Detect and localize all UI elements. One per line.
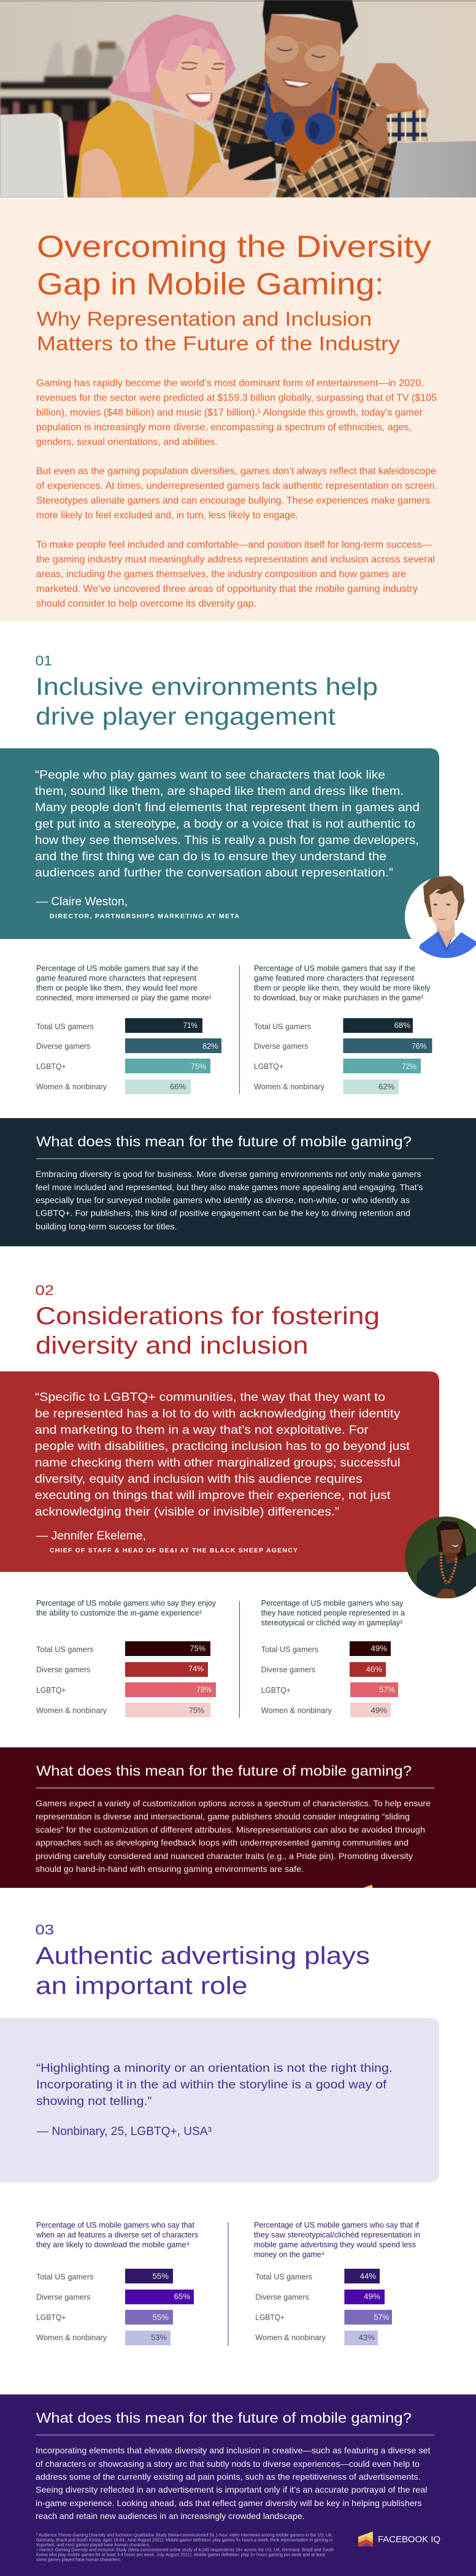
panel: quote from Jennifer Ekeleme: executing on things that will improve their experience, not just xyxy=(35,1489,391,1502)
chart: spend less when ad is stereotypical: money on the game⁴ xyxy=(254,2250,324,2259)
chart: more likely to download or buy: 62% xyxy=(378,1082,394,1091)
person: man with glasses and headphones xyxy=(213,0,429,197)
footnotes: important, and most games played have human characters. xyxy=(36,2542,150,2548)
chart: enjoy customizing the in-game experience: 75% xyxy=(189,1706,204,1715)
heading: section 02 xyxy=(36,1282,380,1359)
photo: two friends laughing at a phone xyxy=(0,0,476,197)
chart: spend less when ad is stereotypical: they saw stereotypical/clichéd representation in xyxy=(254,2231,420,2239)
icon: phone in hand xyxy=(185,141,279,197)
panel: what does this mean, section 03: Incorporating elements that elevate diversity and inclusion in creative—such as featuring a diverse set xyxy=(36,2445,431,2455)
panel: what does this mean, section 01: What does this mean for the future of mobile gaming? xyxy=(36,1133,412,1149)
intro text block: areas, including the games themselves, the industry composition and how games are xyxy=(36,569,406,580)
chart: enjoy customizing the in-game experience: the ability to customize the in-game experience² xyxy=(36,1609,202,1617)
chart: feel more connected: Diverse gamers xyxy=(36,1042,91,1051)
chart: likely to download when ad is diverse: 55% xyxy=(152,2272,169,2281)
footnotes: some games played have human characters. xyxy=(36,2557,121,2563)
panel: what does this mean, section 03: reach and retain new audiences in an increasingly crowded landscape. xyxy=(36,2511,304,2521)
chart: spend less when ad is stereotypical: 44% xyxy=(360,2272,377,2281)
chart: feel more connected: connected, more immersed or play the game more¹ xyxy=(36,994,212,1002)
chart: feel more connected: 82% xyxy=(202,1041,218,1051)
chart: feel more connected: them or people like them, they would feel more xyxy=(36,984,198,992)
intro text block xyxy=(36,378,437,609)
chart: noticed stereotypical representation: they have noticed people represented in a xyxy=(261,1609,405,1617)
panel: quote from Claire Weston: get put into a stereotype, a body or a voice that is not authentic to xyxy=(35,817,415,830)
chart: feel more connected: Total US gamers xyxy=(36,1022,93,1031)
panel: what does this mean, section 02: What does this mean for the future of mobile gaming? xyxy=(36,1763,412,1779)
intro text block: Gaming has rapidly become the world’s most dominant form of entertainment—in 2020, xyxy=(36,378,424,389)
panel: what does this mean, section 03: in-game experience. Looking ahead, ads that reflect gamer diversity will be key in helping publishers xyxy=(36,2498,422,2508)
chart: spend less when ad is stereotypical xyxy=(254,2221,420,2345)
panel: quote from Jennifer Ekeleme xyxy=(0,1371,439,1572)
panel: what does this mean, section 02: representation is diverse and intersectional, game publishers should consider integrating “sliding xyxy=(36,1812,410,1822)
chart: more likely to download or buy: Women & nonbinary xyxy=(254,1083,325,1091)
panel: quote from Jennifer Ekeleme: diversity, equity and inclusion with this audience requires xyxy=(35,1472,363,1485)
panel: what does this mean, section 02: Gamers expect a variety of customization options across a spectrum of characteristics. To help ensure xyxy=(36,1798,431,1808)
heading: section 01 xyxy=(36,653,378,730)
intro text block: of experiences. At times, underrepresented gamers lack authentic representation on screen. xyxy=(36,481,437,491)
chart: likely to download when ad is diverse: when an ad features a diverse set of characters xyxy=(36,2231,198,2239)
panel: quote from Jennifer Ekeleme: be represented has a lot to do with acknowledging their identity xyxy=(35,1407,401,1420)
chart: likely to download when ad is diverse: Diverse gamers xyxy=(36,2293,91,2302)
panel: quote from Claire Weston: and the first thing we can do is to ensure they understand the xyxy=(35,850,386,864)
intro text block: the gaming industry must meaningfully address representation and inclusion across several xyxy=(36,554,435,565)
panel: quote from Jennifer Ekeleme: acknowledging their (visible or invisible) differences.” xyxy=(35,1505,339,1519)
panel: quote from Jennifer Ekeleme: — Jennifer Ekeleme, xyxy=(36,1529,146,1543)
chart: more likely to download or buy: game featured more characters that represent xyxy=(254,974,415,983)
heading: section 03 xyxy=(36,1922,370,1999)
intro text block: more likely to feel excluded and, in turn, less likely to engage. xyxy=(36,510,298,521)
intro text block: Stereotypes alienate gamers and can encourage bullying. These experiences make gamers xyxy=(36,496,430,506)
heading: section 03: an important role xyxy=(36,1972,248,1999)
chart: noticed stereotypical representation: Diverse gamers xyxy=(261,1666,315,1674)
chart: enjoy customizing the in-game experience: LGBTQ+ xyxy=(36,1686,66,1695)
chart: spend less when ad is stereotypical: Percentage of US mobile gamers who say that if xyxy=(254,2221,420,2229)
chart: feel more connected: 66% xyxy=(170,1082,186,1091)
heading: section 03: Authentic advertising plays xyxy=(36,1942,370,1969)
panel: quote from Claire Weston: Many people don’t find elements that represent them in games and xyxy=(35,801,420,815)
panel: quote from Claire Weston: audiences and further the conversation about representation.” xyxy=(35,866,393,880)
heading: section 01: 01 xyxy=(36,653,52,669)
footnotes: ³ Audience Theory Gaming Diversity and Inclusion Qualitative Study (Meta-commissioned 59 1-hour video interviews among mobile gamers in the US, UK, xyxy=(36,2532,333,2538)
photo: portrait of Claire Weston xyxy=(405,876,476,958)
panel: what does this mean, section 01: building long-term success for titles. xyxy=(36,1222,177,1232)
chart: enjoy customizing the in-game experience: 75% xyxy=(190,1644,205,1653)
footnotes: Germany, Brazil and South Korea, ages 18-64, June-August 2021). Mobile gamer definition: play games 5+ hours a week, think representation in gaming is xyxy=(36,2537,332,2543)
chart: likely to download when ad is diverse: 55% xyxy=(152,2313,169,2322)
footnotes: ⁴ HarrisX Gaming Diversity and Inclusion Study (Meta-commissioned online study of 6,045 respondents 18+ across the US, UK, Germany, Brazil and South xyxy=(36,2547,334,2553)
title: Overcoming the Diversity xyxy=(37,229,431,264)
chart: likely to download when ad is diverse: Percentage of US mobile gamers who say that xyxy=(36,2221,195,2229)
panel: gamer quote on advertising xyxy=(0,2018,439,2182)
panel: quote from Jennifer Ekeleme: and marketing to them in a way that’s not exploitative. For xyxy=(35,1423,369,1436)
chart: noticed stereotypical representation: Women & nonbinary xyxy=(261,1706,332,1715)
chart: noticed stereotypical representation: stereotypical or clichéd way in gameplay² xyxy=(261,1619,402,1627)
chart: noticed stereotypical representation: 46% xyxy=(366,1665,382,1674)
chart: noticed stereotypical representation: Total US gamers xyxy=(261,1646,318,1654)
chart: more likely to download or buy: Diverse gamers xyxy=(254,1042,308,1051)
intro text block: billion), movies ($48 billion) and music ($17 billion).¹ Alongside this growth, today’s gamer xyxy=(36,407,423,418)
chart: likely to download when ad is diverse: Total US gamers xyxy=(36,2273,93,2282)
panel: quote from Jennifer Ekeleme: name checking them with other marginalized groups; successful xyxy=(35,1456,400,1470)
heading: section 01: drive player engagement xyxy=(36,703,336,730)
panel: quote from Claire Weston: — Claire Weston, xyxy=(36,895,128,908)
chart: enjoy customizing the in-game experience: Percentage of US mobile gamers who say they enjoy xyxy=(36,1599,217,1608)
chart: feel more connected: Percentage of US mobile gamers that say if the xyxy=(36,964,198,973)
heading: section 02: diversity and inclusion xyxy=(36,1332,308,1359)
intro text block: population is increasingly more diverse, encompassing a spectrum of ethnicities, ages, xyxy=(36,422,412,433)
panel: quote from Claire Weston: them, sound like them, are shaped like them and dress like them. xyxy=(35,784,404,798)
panel: quote from Jennifer Ekeleme: CHIEF OF STAFF & HEAD OF DE&I AT THE BLACK SHEEP AGENCY xyxy=(50,1547,298,1554)
chart: feel more connected: 71% xyxy=(183,1021,198,1030)
panel: what does this mean, section 02: should go hand-in-hand with ensuring gaming environments are safe. xyxy=(36,1864,304,1874)
panel: gamer quote on advertising: “Highlighting a minority or an orientation is not the right thing. xyxy=(36,2061,393,2075)
footnotes: Korea who play mobile games for at least 3-4 hours per week, July-August 2021). Mobile gamer definition: play 3+ hours gaming per week and at least xyxy=(36,2552,326,2558)
panel: quote from Claire Weston: how they see themselves. This is really a push for game developers, xyxy=(35,834,419,847)
chart: noticed stereotypical representation: 57% xyxy=(379,1685,395,1694)
chart: feel more connected xyxy=(36,964,221,1094)
heading: section 02: 02 xyxy=(36,1282,54,1298)
chart: spend less when ad is stereotypical: Diverse gamers xyxy=(255,2293,309,2302)
subtitle: Why Representation and Inclusion xyxy=(37,308,372,330)
chart: likely to download when ad is diverse: LGBTQ+ xyxy=(36,2313,66,2322)
panel: what does this mean, section 03: What does this mean for the future of mobile gaming? xyxy=(36,2410,412,2426)
chart: likely to download when ad is diverse: 53% xyxy=(151,2333,167,2342)
intro text block: genders, sexual orientations, and abilities. xyxy=(36,437,217,448)
chart: spend less when ad is stereotypical: 43% xyxy=(359,2333,375,2342)
panel: what does this mean, section 02: scales” for the customization of different attributes. Misrepresentations can also be avoided through xyxy=(36,1825,425,1834)
chart: feel more connected: game featured more characters that represent xyxy=(36,974,197,983)
heading: section 01: Inclusive environments help xyxy=(36,673,378,700)
chart: more likely to download or buy xyxy=(254,964,432,1094)
photo: portrait of Jennifer Ekeleme xyxy=(405,1516,476,1598)
panel: quote from Claire Weston: “People who play games want to see characters that look like xyxy=(35,768,385,781)
panel: what does this mean, section 02: providing carefully considered and nuanced character traits (e.g., a Pride pin). Promoting diversity xyxy=(36,1851,413,1861)
intro text block: To make people feel included and comfortable—and position itself for long-term success— xyxy=(36,540,432,550)
chart: more likely to download or buy: Percentage of US mobile gamers that say if the xyxy=(254,964,415,973)
panel: what does this mean, section 03: address some of the currently existing ad pain points, such as the repetitiveness of advertisements. xyxy=(36,2472,421,2482)
panel: what does this mean, section 01: Embracing diversity is good for business. More diverse gaming environments not only make gamers xyxy=(36,1169,421,1179)
footnotes xyxy=(36,2532,334,2563)
heading: section 02: Considerations for fostering xyxy=(36,1303,380,1330)
chart: noticed stereotypical representation xyxy=(261,1599,405,1717)
chart: enjoy customizing the in-game experience: 74% xyxy=(188,1664,204,1673)
chart: likely to download when ad is diverse: Women & nonbinary xyxy=(36,2334,107,2342)
chart: likely to download when ad is diverse: they are likely to download the mobile game⁴ xyxy=(36,2241,190,2249)
panel: quote from Jennifer Ekeleme: people with disabilities, practicing inclusion has to go beyond just xyxy=(35,1439,410,1453)
panel: what does this mean, section 01: LGBTQ+. For publishers, this kind of positive engagement can be the key to driving retention and xyxy=(36,1208,410,1218)
chart: more likely to download or buy: to download, buy or make purchases in the game¹ xyxy=(254,994,424,1002)
title xyxy=(37,229,431,301)
chart: spend less when ad is stereotypical: 57% xyxy=(374,2313,390,2322)
panel: what does this mean, section 01: especially true for surveyed mobile gamers who identify as diverse, non-white, or who identify as xyxy=(36,1195,410,1205)
chart: noticed stereotypical representation: LGBTQ+ xyxy=(261,1686,291,1695)
chart: noticed stereotypical representation: 49% xyxy=(370,1644,387,1653)
chart: spend less when ad is stereotypical: LGBTQ+ xyxy=(255,2313,285,2322)
chart: feel more connected: 75% xyxy=(191,1062,206,1071)
chart: noticed stereotypical representation: 49% xyxy=(370,1706,387,1715)
chart: more likely to download or buy: LGBTQ+ xyxy=(254,1062,283,1071)
intro text block: marketed. We’ve uncovered three areas of opportunity that the mobile gaming industry xyxy=(36,584,418,594)
chart: likely to download when ad is diverse xyxy=(36,2221,198,2345)
subtitle: Matters to the Future of the Industry xyxy=(37,332,400,355)
chart: more likely to download or buy: 76% xyxy=(412,1041,427,1051)
chart: spend less when ad is stereotypical: 49% xyxy=(364,2292,380,2301)
panel: gamer quote on advertising: Incorporating it in the ad within the storyline is a good way of xyxy=(36,2078,387,2091)
chart: enjoy customizing the in-game experience: Women & nonbinary xyxy=(36,1706,107,1715)
intro text block: should consider to help overcome its diversity gap. xyxy=(36,599,256,609)
chart: noticed stereotypical representation: Percentage of US mobile gamers who say xyxy=(261,1599,404,1608)
subtitle xyxy=(37,308,400,355)
chart: likely to download when ad is diverse: 65% xyxy=(174,2292,191,2301)
heading: section 03: 03 xyxy=(36,1922,54,1938)
chart: more likely to download or buy: 68% xyxy=(394,1021,410,1030)
intro text block: revenues for the sector were predicted at $159.3 billion globally, surpassing that of TV ($105 xyxy=(36,393,437,404)
intro text block: But even as the gaming population diversifies, games don’t always reflect that kaleidoscope xyxy=(36,466,436,477)
title: Gap in Mobile Gaming: xyxy=(37,267,384,301)
chart: spend less when ad is stereotypical: mobile game advertising they would spend less xyxy=(254,2241,416,2249)
panel: what does this mean, section 03: Seeing diversity reflected in an advertisement is important only if it’s an accurate portrayal of the real xyxy=(36,2485,427,2494)
panel: page background intro xyxy=(0,197,476,621)
panel: what does this mean, section 03 xyxy=(0,2394,476,2576)
panel: what does this mean, section 03: of characters or showcasing a story arc that subtly nods to diverse experiences—could even help to xyxy=(36,2459,420,2469)
logo: Facebook IQ xyxy=(358,2532,440,2547)
panel: what does this mean, section 02 xyxy=(0,1747,476,1888)
panel: what does this mean, section 02: approaches such as developing feedback loops with underrepresented gaming communities and xyxy=(36,1838,409,1847)
chart: feel more connected: LGBTQ+ xyxy=(36,1062,66,1071)
chart: enjoy customizing the in-game experience: 78% xyxy=(196,1685,212,1694)
panel: what does this mean, section 01: feel more included and represented, but they also make games more appealing and engaging. That’s xyxy=(36,1183,423,1192)
chart: spend less when ad is stereotypical: Total US gamers xyxy=(255,2273,312,2282)
chart: enjoy customizing the in-game experience: Diverse gamers xyxy=(36,1666,91,1674)
chart: feel more connected: Women & nonbinary xyxy=(36,1083,107,1091)
panel: quote from Claire Weston xyxy=(0,748,439,939)
chart: enjoy customizing the in-game experience: Total US gamers xyxy=(36,1646,93,1654)
chart: enjoy customizing the in-game experience xyxy=(36,1599,217,1717)
chart: more likely to download or buy: 72% xyxy=(402,1062,416,1071)
panel: quote from Jennifer Ekeleme: “Specific to LGBTQ+ communities, the way that they want to xyxy=(35,1390,385,1404)
person: woman with pink hair xyxy=(73,14,236,197)
panel: what does this mean, section 01 xyxy=(0,1118,476,1246)
chart: spend less when ad is stereotypical: Women & nonbinary xyxy=(255,2334,326,2342)
panel: gamer quote on advertising: showing not telling.” xyxy=(36,2095,152,2108)
panel: gamer quote on advertising: — Nonbinary, 25, LGBTQ+, USA³ xyxy=(37,2125,212,2138)
chart: more likely to download or buy: Total US gamers xyxy=(254,1022,311,1031)
chart: more likely to download or buy: them or people like them, they would be more likely xyxy=(254,984,431,992)
logo: Facebook IQ: FACEBOOK IQ xyxy=(378,2534,440,2545)
panel: quote from Claire Weston: DIRECTOR, PARTNERSHIPS MARKETING AT META xyxy=(50,913,239,920)
